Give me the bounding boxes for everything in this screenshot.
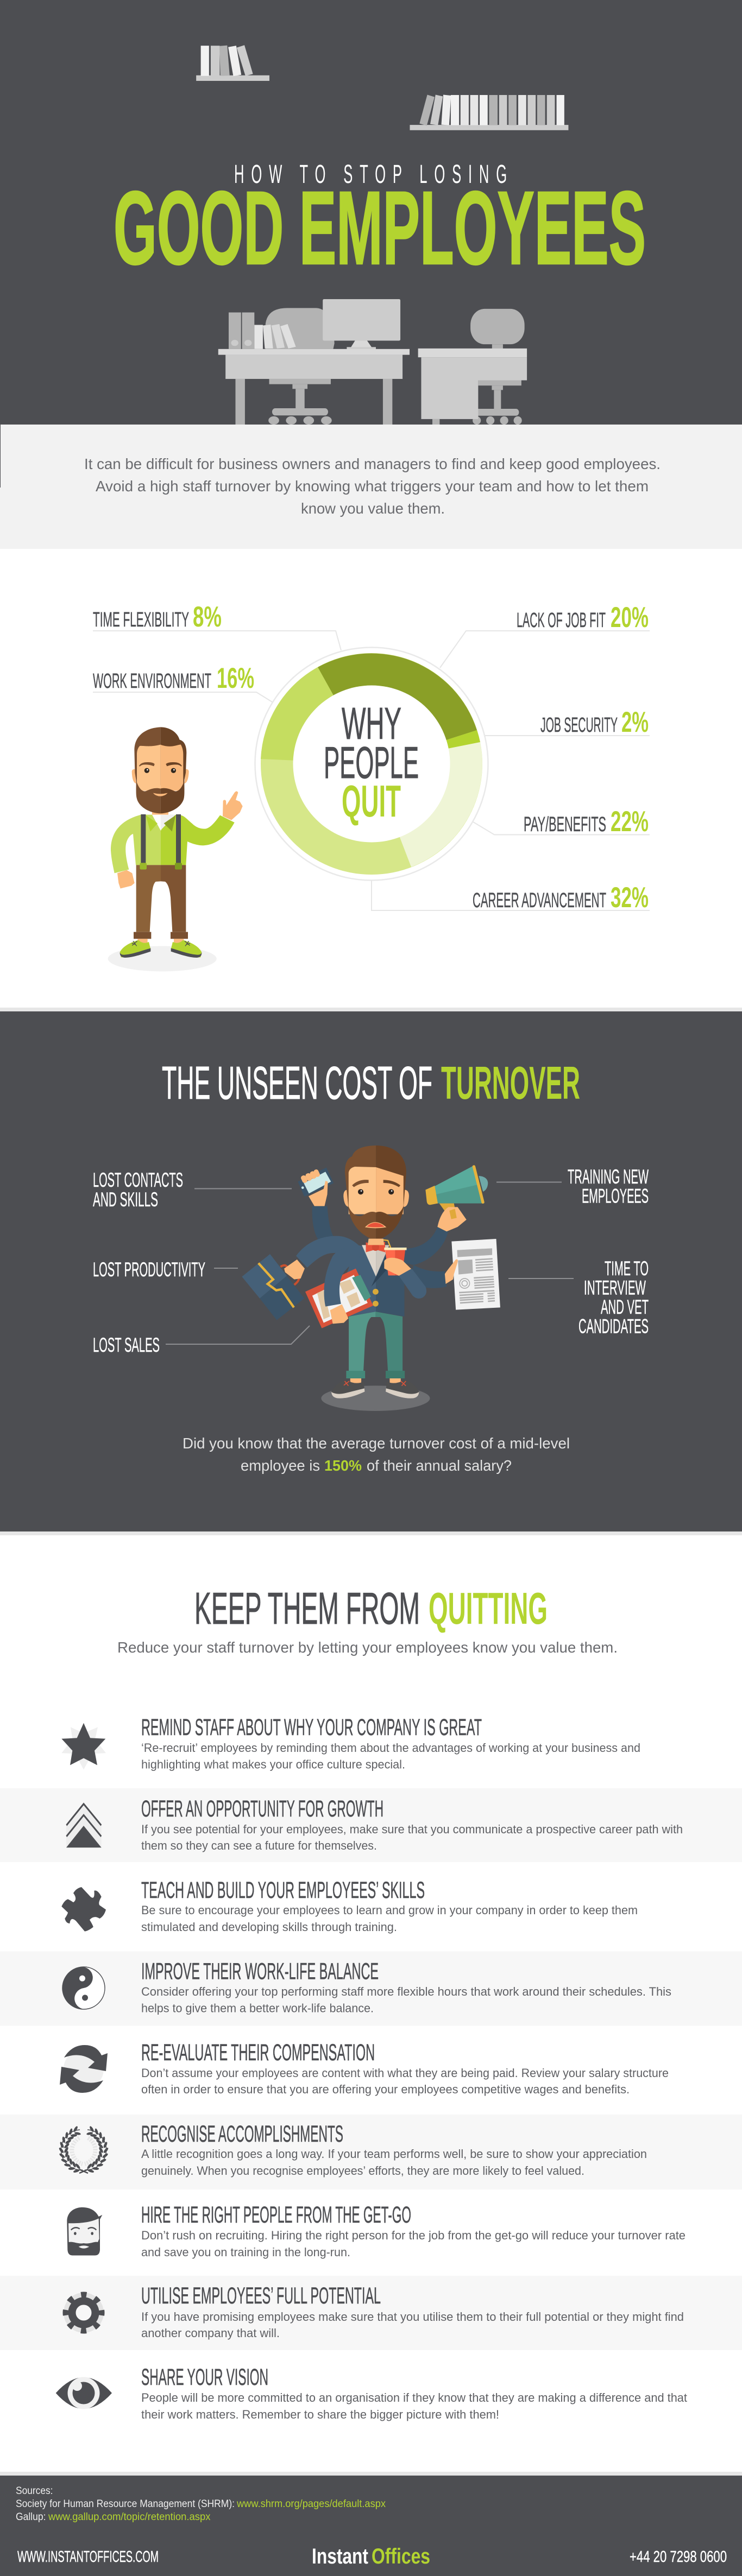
heading: THE UNSEEN COST OF [162, 1058, 432, 1109]
tip 5: often in order to ensure that you are offering your employees competitive wages and benefits. [141, 2083, 630, 2096]
tip 3: stimulated and developing skills through training. [141, 1920, 397, 1934]
callout: time to interview [508, 1257, 649, 1338]
tip 4: helps to give them a better work-life balance. [141, 2001, 374, 2015]
panel: hero [0, 0, 742, 425]
callout: work environment: 16% [217, 662, 254, 694]
turnover cost statement: 150% [324, 1457, 362, 1474]
callout: lost contacts: AND SKILLS [93, 1188, 158, 1211]
tip 5: Don’t assume your employees are content with what they are being paid. Review your salary structure [141, 2066, 669, 2080]
tip 8 [64, 2283, 684, 2340]
donut centre label: QUIT [342, 776, 401, 826]
callout: lack of job fit: LACK OF JOB FIT [517, 609, 606, 632]
intro text: It can be difficult for business owners and managers to find and keep good employees. [84, 455, 661, 472]
sources [16, 2485, 386, 2523]
callout: lost contacts [93, 1169, 292, 1211]
sources: Sources: [16, 2485, 53, 2497]
callout: pay and benefits: 22% [611, 806, 649, 838]
tip 1: ‘Re-recruit’ employees by reminding them about the advantages of working at your business and [141, 1741, 640, 1755]
callout: career advancement [372, 881, 650, 914]
callout: pay and benefits [473, 806, 650, 838]
turnover cost statement: of their annual salary? [367, 1457, 512, 1474]
tip 4 [60, 1959, 671, 2015]
callout: work environment: WORK ENVIRONMENT [93, 670, 211, 693]
tip 4: Consider offering your top performing staff more flexible hours that work around their schedules. This [141, 1985, 671, 1998]
callout: lack of job fit [440, 602, 650, 668]
tip 1: highlighting what makes your office culture special. [141, 1758, 405, 1771]
tip 8: another company that will. [141, 2326, 280, 2340]
intro text: know you value them. [301, 500, 445, 517]
tip 7: HIRE THE RIGHT PEOPLE FROM THE GET-GO [141, 2202, 411, 2228]
icon: bearded face [67, 2207, 102, 2255]
tip 5 [60, 2040, 669, 2096]
tip 1 [61, 1714, 640, 1771]
tip 6 [58, 2121, 647, 2178]
callout: job security: JOB SECURITY [540, 714, 618, 737]
sources: www.gallup.com/topic/retention.aspx [48, 2511, 211, 2523]
tip 6: RECOGNISE ACCOMPLISHMENTS [141, 2121, 343, 2147]
callout: time to interview: TIME TO [605, 1257, 649, 1280]
icon: eye [56, 2377, 112, 2409]
icon: man pointing [108, 727, 243, 971]
tip 3: Be sure to encourage your employees to learn and grow in your company in order to keep them [141, 1903, 638, 1917]
callout: time flexibility [93, 601, 341, 650]
callout: training new employees [496, 1166, 649, 1207]
callout: time flexibility: TIME FLEXIBILITY [93, 609, 189, 631]
tip 9: SHARE YOUR VISION [141, 2364, 268, 2390]
icon: refresh arrows [60, 2045, 108, 2093]
tip 8: UTILISE EMPLOYEES’ FULL POTENTIAL [141, 2283, 381, 2309]
callout: lost productivity: LOST PRODUCTIVITY [93, 1258, 205, 1281]
icon: bookshelf left [196, 45, 269, 81]
icon: bookshelf right [410, 94, 568, 130]
logo: Instant [312, 2545, 368, 2568]
tip 9 [56, 2364, 687, 2421]
callout: training new employees: TRAINING NEW [568, 1166, 649, 1188]
callout: job security: 2% [621, 706, 649, 738]
tip 5: RE-EVALUATE THEIR COMPENSATION [141, 2040, 375, 2066]
tip 7 [67, 2202, 686, 2259]
callout: time flexibility: 8% [193, 601, 222, 633]
callout: time to interview: INTERVIEW [584, 1277, 646, 1299]
turnover cost statement: employee is [241, 1457, 320, 1474]
sources: Society for Human Resource Management (SHRM): [16, 2498, 235, 2510]
icon: office desks [218, 299, 527, 425]
panel: footer [0, 2472, 742, 2576]
callout: lost contacts: LOST CONTACTS [93, 1169, 183, 1191]
callout: work environment [93, 662, 272, 702]
panel: why people quit [0, 549, 742, 1011]
turnover cost statement [183, 1435, 570, 1474]
tip 3: TEACH AND BUILD YOUR EMPLOYEES’ SKILLS [141, 1877, 425, 1903]
callout: career advancement: 32% [611, 882, 649, 914]
tip 2: If you see potential for your employees, make sure that you communicate a prospective career path with [141, 1822, 683, 1836]
intro text: Avoid a high staff turnover by knowing what triggers your team and how to let them [96, 478, 649, 495]
icon: puzzle piece [61, 1887, 106, 1932]
tip 9: People will be more committed to an organisation if they know that they are making a difference and that [141, 2391, 687, 2404]
callout: time to interview: AND VET [601, 1296, 649, 1318]
tip 3 [61, 1877, 638, 1934]
icon: laurel wreath [58, 2125, 109, 2175]
heading: KEEP THEM FROM [194, 1583, 420, 1634]
website: WWW.INSTANTOFFICES.COM [17, 2548, 159, 2566]
callout: career advancement: CAREER ADVANCEMENT [473, 889, 606, 912]
icon: star [61, 1723, 106, 1769]
donut centre label: PEOPLE [324, 737, 419, 788]
callout: pay and benefits: PAY/BENEFITS [524, 813, 606, 836]
icon: chevrons [66, 1803, 102, 1847]
panel: unseen cost of turnover [0, 1011, 742, 1535]
tip 2: them so they can see a future for themselves. [141, 1839, 377, 1852]
tip 7: Don’t rush on recruiting. Hiring the right person for the job from the get-go will reduce your turnover rate [141, 2229, 686, 2242]
tip 4: IMPROVE THEIR WORK-LIFE BALANCE [141, 1959, 379, 1985]
intro text [84, 455, 661, 517]
subheading: Reduce your staff turnover by letting your employees know you value them. [117, 1639, 618, 1656]
logo [312, 2545, 430, 2568]
donut centre label [324, 698, 419, 826]
tip 6: A little recognition goes a long way. If your team performs well, be sure to show your appreciation [141, 2147, 647, 2161]
callout: training new employees: EMPLOYEES [582, 1185, 649, 1207]
callout: lost sales [93, 1326, 310, 1356]
logo: Offices [372, 2545, 430, 2568]
donut centre label: WHY [342, 698, 401, 749]
tip 9: their work matters. Remember to share the bigger picture with them! [141, 2408, 499, 2421]
heading: TURNOVER [441, 1058, 580, 1109]
tip 2: OFFER AN OPPORTUNITY FOR GROWTH [141, 1796, 383, 1822]
tip 6: genuinely. When you recognise employees’ efforts, they are more likely to feel valued. [141, 2164, 584, 2178]
icon: yin yang [60, 1964, 108, 2012]
callout: time to interview: CANDIDATES [578, 1315, 649, 1338]
tip 8: If you have promising employees make sure that you utilise them to their full potential or they might find [141, 2310, 684, 2324]
panel: intro [0, 425, 742, 549]
sources: Gallup: [16, 2511, 46, 2523]
panel: keep them from quitting [0, 1583, 742, 2421]
donut chart [255, 647, 488, 881]
tip 7: and save you on training in the long-run. [141, 2245, 350, 2259]
icon: gear [64, 2293, 104, 2333]
sources: www.shrm.org/pages/default.aspx [236, 2498, 386, 2510]
tip 2 [66, 1796, 683, 1852]
icon: multitasking man [242, 1145, 500, 1411]
heading: QUITTING [429, 1583, 548, 1634]
callout: job security [485, 706, 650, 738]
callout: lost sales: LOST SALES [93, 1334, 160, 1356]
callout: lack of job fit: 20% [611, 602, 649, 634]
turnover cost statement: Did you know that the average turnover cost of a mid-level [183, 1435, 570, 1452]
